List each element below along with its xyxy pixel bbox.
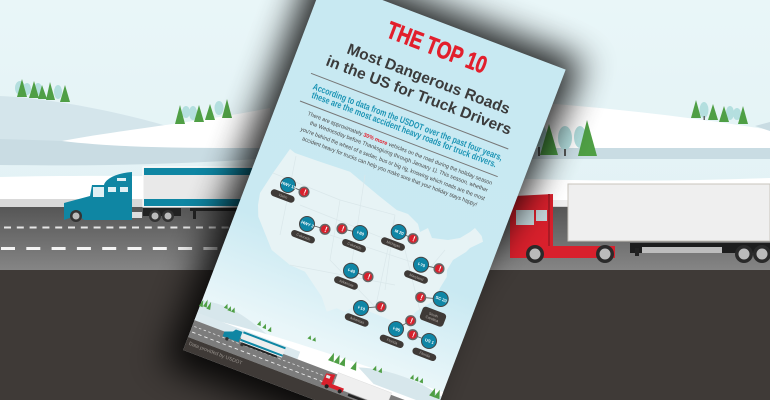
subtitle line 1: According to data from the USDOT over the past four years,	[312, 82, 504, 163]
marker: HWY 3 Colorado: HWY 3	[300, 219, 315, 229]
far band	[0, 139, 270, 165]
trees: right cluster by the road	[535, 120, 597, 156]
marker: HWY 15 Idaho: !	[302, 188, 308, 197]
right foreground snow	[500, 178, 770, 206]
marker: SC 20 South Carolina: South	[428, 312, 438, 319]
left guard rail	[0, 199, 270, 207]
under-trailer frame	[630, 243, 770, 253]
title: most dangerous roads: Most Dangerous Roads	[345, 41, 512, 118]
wheels	[70, 210, 82, 222]
marker: I-40 Arkansas: I-40	[347, 267, 356, 275]
marker: I-80 Colorado: Colorado	[347, 242, 362, 251]
marker: HWY 3 Colorado	[290, 216, 330, 244]
marker: M 20 Michigan: !	[411, 234, 417, 244]
intro paragraph: you're behind the wheel of a sedan, bus or big rig, knowing which roads are the most	[299, 127, 486, 202]
marker: I-40 Arkansas	[333, 263, 373, 291]
marker: I-70 Maryland	[403, 257, 444, 285]
chassis	[143, 208, 181, 216]
cab	[510, 194, 615, 258]
marker: HWY 15 Idaho: HWY 15	[280, 180, 297, 190]
trailer	[568, 184, 770, 241]
marker: M 20 Michigan	[380, 224, 418, 252]
left snowy hill	[0, 96, 170, 145]
poster teal truck	[222, 325, 286, 361]
marker: US 1 Florida: !	[411, 330, 416, 340]
poster red truck	[320, 368, 392, 400]
trailer	[143, 167, 253, 207]
source credit: Data provided by USDOT	[188, 341, 243, 367]
marker: US 1 Florida: Florida	[419, 351, 431, 358]
US map	[258, 149, 483, 333]
intro paragraph: accident heavy for trucks can help you make sure that your holiday stays happy!	[301, 136, 478, 208]
subtitle with rules	[300, 73, 508, 177]
trees: upper right cluster	[691, 100, 748, 124]
poster bottom scene: road	[188, 320, 436, 400]
road	[0, 207, 770, 270]
mirror gap fairing	[553, 200, 569, 206]
marker: I-95 Florida	[379, 316, 416, 349]
marker: I-95 Florida: I-95	[392, 325, 401, 333]
marker: M 20 Michigan: M 20	[394, 228, 405, 236]
marker: I-80 Colorado	[337, 224, 368, 253]
poster panel	[182, 0, 566, 400]
marker: I-10 Arkansas: !	[379, 302, 385, 312]
trees: middle left cluster	[175, 99, 232, 124]
left white hill	[62, 108, 270, 148]
red semi truck	[510, 184, 770, 263]
marker: I-40 Arkansas: !	[366, 272, 372, 282]
poster drop shadow	[163, 0, 584, 400]
poster bottom scene: dark ground	[183, 337, 429, 400]
marker: HWY 3 Colorado: Colorado	[296, 233, 311, 242]
marker: HWY 15 Idaho	[270, 178, 309, 204]
right guard rail	[500, 200, 770, 208]
intro paragraph: There are approximately 30% more vehicles on the road during the holiday season	[307, 111, 493, 187]
road lane dashes, large	[1, 247, 240, 250]
poster bottom scene: hills	[197, 298, 287, 346]
title: the top 10: THE TOP 10	[383, 17, 491, 79]
dark ground	[0, 270, 770, 400]
wheels	[526, 245, 544, 263]
marker: I-80 Colorado: !	[340, 224, 346, 234]
marker: I-70 Maryland: Maryland	[409, 273, 424, 282]
road lane dashes, small	[4, 226, 240, 228]
subtitle line 2: these are the most accident heavy roads for truck drivers.	[310, 90, 498, 169]
marker: HWY 15 Idaho: Idaho	[278, 193, 288, 200]
right far hill	[755, 122, 770, 131]
title	[324, 17, 514, 139]
intro paragraph: the Wednesday before Thanksgiving through January 1). This season, whether	[309, 121, 489, 194]
left foreground snow	[0, 176, 270, 201]
right white hill	[500, 100, 770, 149]
marker: I-80 Colorado: I-80	[356, 229, 365, 237]
teal semi truck	[64, 167, 254, 222]
cab	[64, 172, 132, 220]
marker: SC 20 South Carolina: SC 20	[435, 295, 448, 304]
right band	[500, 148, 770, 159]
marker: SC 20 South Carolina: !	[419, 293, 424, 302]
marker: I-10 Arkansas: I-10	[357, 304, 366, 312]
marker: I-70 Maryland: I-70	[417, 261, 426, 269]
marker: I-95 Florida: Florida	[386, 338, 398, 345]
state lines	[273, 156, 445, 312]
marker: HWY 3 Colorado: !	[323, 225, 329, 234]
trees: upper left cluster	[15, 79, 70, 102]
marker: US 1 Florida	[408, 330, 437, 362]
marker: I-10 Arkansas	[344, 300, 386, 328]
marker: SC 20 South Carolina: Carolina	[425, 315, 439, 323]
marker: US 1 Florida: US 1	[424, 337, 435, 345]
title: in the us for truck drivers: in the US for Truck Drivers	[324, 53, 514, 139]
marker: I-40 Arkansas: Arkansas	[339, 279, 354, 288]
poster trees	[197, 295, 444, 400]
marker: M 20 Michigan: Michigan	[386, 240, 401, 249]
marker: I-10 Arkansas: Arkansas	[349, 316, 365, 325]
marker: I-95 Florida: !	[409, 316, 414, 326]
marker: I-70 Maryland: !	[437, 264, 443, 274]
marker: SC 20 South Carolina	[416, 292, 448, 328]
